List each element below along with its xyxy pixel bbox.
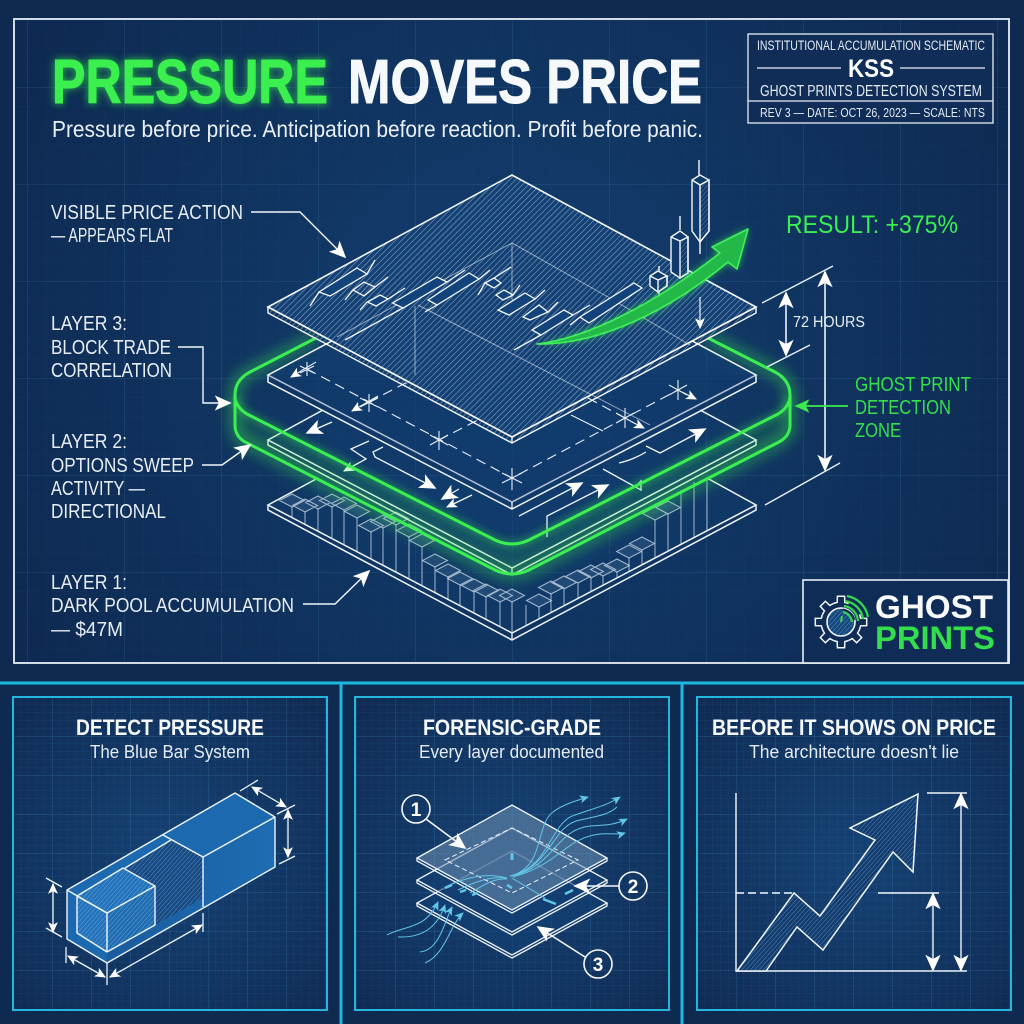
panel: detect pressure (13, 697, 327, 1010)
green result arrow (537, 229, 748, 344)
section dividers (0, 683, 1024, 1024)
callout: layer 2: OPTIONS SWEEP (51, 455, 194, 477)
panel: forensic-grade (355, 697, 669, 1010)
title: PRESSURE (52, 48, 328, 117)
logo: ghost prints: PRINTS (875, 620, 995, 656)
dimension: 72 hours: 72 HOURS (793, 314, 865, 331)
title: MOVES PRICE (348, 48, 702, 117)
dark pool volume bars (280, 478, 707, 633)
title: PRESSURE (52, 48, 328, 117)
icon: gear with radar (815, 596, 868, 648)
panel: main schematic (14, 19, 1009, 663)
callout: layer 1: LAYER 1: (51, 572, 127, 594)
callout: layer 1: — $47M (51, 619, 123, 641)
callout: layer 3: BLOCK TRADE (51, 337, 171, 359)
chart: rising arrow (736, 793, 967, 971)
callout: visible price action: VISIBLE PRICE ACTION (51, 202, 243, 224)
callout: visible price action: — APPEARS FLAT (51, 225, 173, 247)
subheading: The Blue Bar System (90, 742, 250, 762)
callout: layer 3 (51, 313, 230, 403)
callout: layer 2: DIRECTIONAL (51, 501, 166, 523)
callout: layer 2: ACTIVITY — (51, 478, 145, 500)
layer 3: block trade plate (268, 245, 756, 509)
title block (748, 34, 993, 123)
ghost print detection zone label (796, 374, 971, 442)
result label: RESULT: +375% (786, 211, 958, 239)
callout: layer 3: LAYER 3: (51, 313, 127, 335)
callout 1 (402, 795, 465, 848)
icon: stacked layers (387, 797, 627, 963)
subheading: Every layer documented (419, 742, 604, 762)
dimension: detection zone height (765, 272, 840, 505)
3D candles rising (650, 160, 709, 298)
callout: layer 1 (51, 571, 369, 641)
title block: KSS (848, 55, 894, 83)
ghost print detection zone label: GHOST PRINT (855, 374, 971, 396)
callout: layer 3: CORRELATION (51, 360, 172, 382)
callout: layer 2: LAYER 2: (51, 431, 127, 453)
callout: layer 1: DARK POOL ACCUMULATION (51, 595, 294, 617)
layer 1: dark pool bars plate (268, 478, 756, 640)
callout 1: 1 (411, 800, 422, 821)
block trade correlation markers (291, 360, 696, 490)
dimension arrows (46, 780, 295, 985)
glowing ghost print detection zone (235, 338, 790, 574)
heading: BEFORE IT SHOWS ON PRICE (712, 715, 996, 740)
callout 3: 3 (593, 955, 603, 976)
heading: FORENSIC-GRADE (423, 715, 601, 740)
callout: visible price action (51, 202, 345, 257)
logo: ghost prints (803, 580, 1008, 663)
logo: ghost prints: GHOST (875, 589, 993, 625)
icon: isometric blue bar (46, 780, 295, 985)
callout: layer 2 (51, 431, 250, 523)
candlesticks on plate (310, 260, 642, 350)
top plate: visible price action (268, 160, 756, 443)
ghost print detection zone label: ZONE (855, 420, 901, 442)
callout 2: 2 (628, 877, 638, 898)
panel: before it shows on price (697, 697, 1011, 1010)
heading: DETECT PRESSURE (76, 715, 264, 740)
data flow lines (387, 797, 627, 963)
callout 3 (538, 927, 612, 978)
options sweep arrows (307, 422, 705, 537)
callout 2 (575, 872, 647, 900)
subtitle: Pressure before price. Anticipation before reaction. Profit before panic. (52, 116, 703, 142)
measurement arrows (736, 793, 967, 970)
layer 2: options sweep plate (268, 410, 756, 575)
ghost print detection zone label: DETECTION (855, 397, 951, 419)
title (52, 48, 702, 117)
dimension: 72 hours (762, 266, 865, 367)
subheading: The architecture doesn't lie (749, 742, 959, 762)
